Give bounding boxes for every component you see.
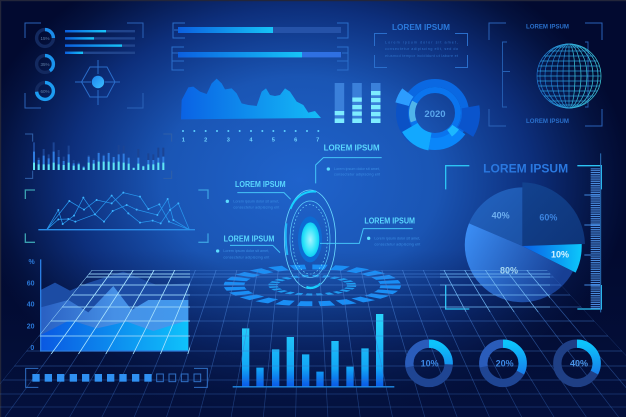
panel: line chart	[25, 190, 208, 242]
callout: lower left	[216, 235, 280, 259]
callout: right: consectetur adipiscing elit	[374, 243, 420, 247]
area chart with axis: 7	[316, 137, 319, 143]
donut: 40%	[557, 344, 597, 383]
donut: 2020 radial chart: 2020	[424, 109, 446, 120]
callout: top right	[316, 143, 382, 183]
area chart with axis: 4	[249, 137, 253, 143]
callout: upper left: Lorem ipsum dolor sit amet,	[233, 199, 279, 203]
pie slices	[522, 182, 585, 246]
body text: eiusmod tempor incididunt ut labore et	[385, 54, 458, 58]
callout: upper left	[226, 180, 291, 209]
progress bars	[65, 30, 135, 54]
callout: lower left: consectetur adipiscing elit	[223, 255, 269, 259]
label: top: LOREM IPSUM	[526, 24, 569, 30]
progress squares strip	[26, 368, 207, 387]
area chart with axis: 1	[182, 137, 185, 143]
icon: hexagon target	[75, 60, 120, 105]
callout: right: LOREM IPSUM	[364, 217, 415, 226]
callout: upper left: LOREM IPSUM	[235, 180, 286, 189]
donut: 10%	[409, 344, 449, 383]
panel: pie chart	[446, 153, 601, 312]
panel: text box	[374, 23, 468, 68]
floor rings	[234, 267, 391, 304]
panel: top progress bars	[172, 23, 348, 70]
donut: 10%: 10%	[421, 358, 439, 368]
body text: Lorem ipsum dolor sit amet,	[385, 40, 458, 44]
floor grid	[0, 270, 626, 417]
callout: top right: LOREM IPSUM	[324, 143, 380, 152]
label: bottom: LOREM IPSUM	[526, 118, 569, 125]
callout: lower left: Lorem ipsum dolor sit amet,	[223, 249, 269, 253]
heading: LOREM IPSUM	[483, 161, 568, 175]
heading: LOREM IPSUM	[392, 23, 450, 32]
panel: layered area chart	[27, 259, 188, 352]
panel: top-left gauges	[25, 23, 143, 108]
donut: 20%	[483, 344, 523, 383]
donut: 20%: 20%	[496, 358, 514, 368]
equalizer columns	[335, 83, 380, 123]
panel: layered area chart: 60	[27, 281, 35, 288]
panel: layered area chart: %	[29, 259, 36, 266]
callout: right: Lorem ipsum dolor sit amet,	[374, 237, 420, 241]
area chart with axis: 6	[294, 137, 297, 143]
gauge: first ring: 15%	[40, 36, 50, 41]
area chart with axis: 3	[227, 137, 230, 143]
area chart with axis	[181, 79, 321, 143]
panel: pie chart: 10%	[551, 250, 569, 260]
callout: top right: consectetur adipiscing elit	[334, 173, 380, 177]
callout: lower left: LOREM IPSUM	[224, 235, 275, 244]
donut: 2020 radial chart	[399, 77, 471, 149]
panel: layered area chart: 20	[27, 323, 35, 330]
body text	[385, 40, 458, 58]
panel: bar chart	[233, 314, 394, 387]
body text: consectetur adipiscing elit, sed do	[385, 47, 458, 51]
scanner ellipses	[284, 190, 336, 289]
panel: pie chart: 60%	[539, 213, 557, 223]
panel: pie chart: 40%	[492, 211, 510, 221]
area chart with axis: 2	[204, 137, 207, 143]
ruler	[584, 153, 601, 312]
panel: globe	[489, 23, 602, 126]
callout: right	[320, 217, 420, 247]
gauge: third ring: 60%	[40, 89, 50, 94]
panel: layered area chart: 40	[27, 302, 35, 309]
callout: top right: Lorem ipsum dolor sit amet,	[334, 167, 380, 171]
donut: 40%: 40%	[570, 358, 588, 368]
panel: pie chart: 80%	[500, 265, 518, 275]
panel: layered area chart: 0	[30, 345, 34, 352]
panel: central scanner with callouts	[216, 143, 420, 304]
icon: wireframe globe	[537, 44, 601, 108]
gauge: second ring: 35%	[40, 62, 50, 67]
area chart with axis: 5	[272, 137, 275, 143]
callout: upper left: consectetur adipiscing elit	[233, 205, 279, 209]
panel: equalizer bars left	[25, 134, 172, 178]
